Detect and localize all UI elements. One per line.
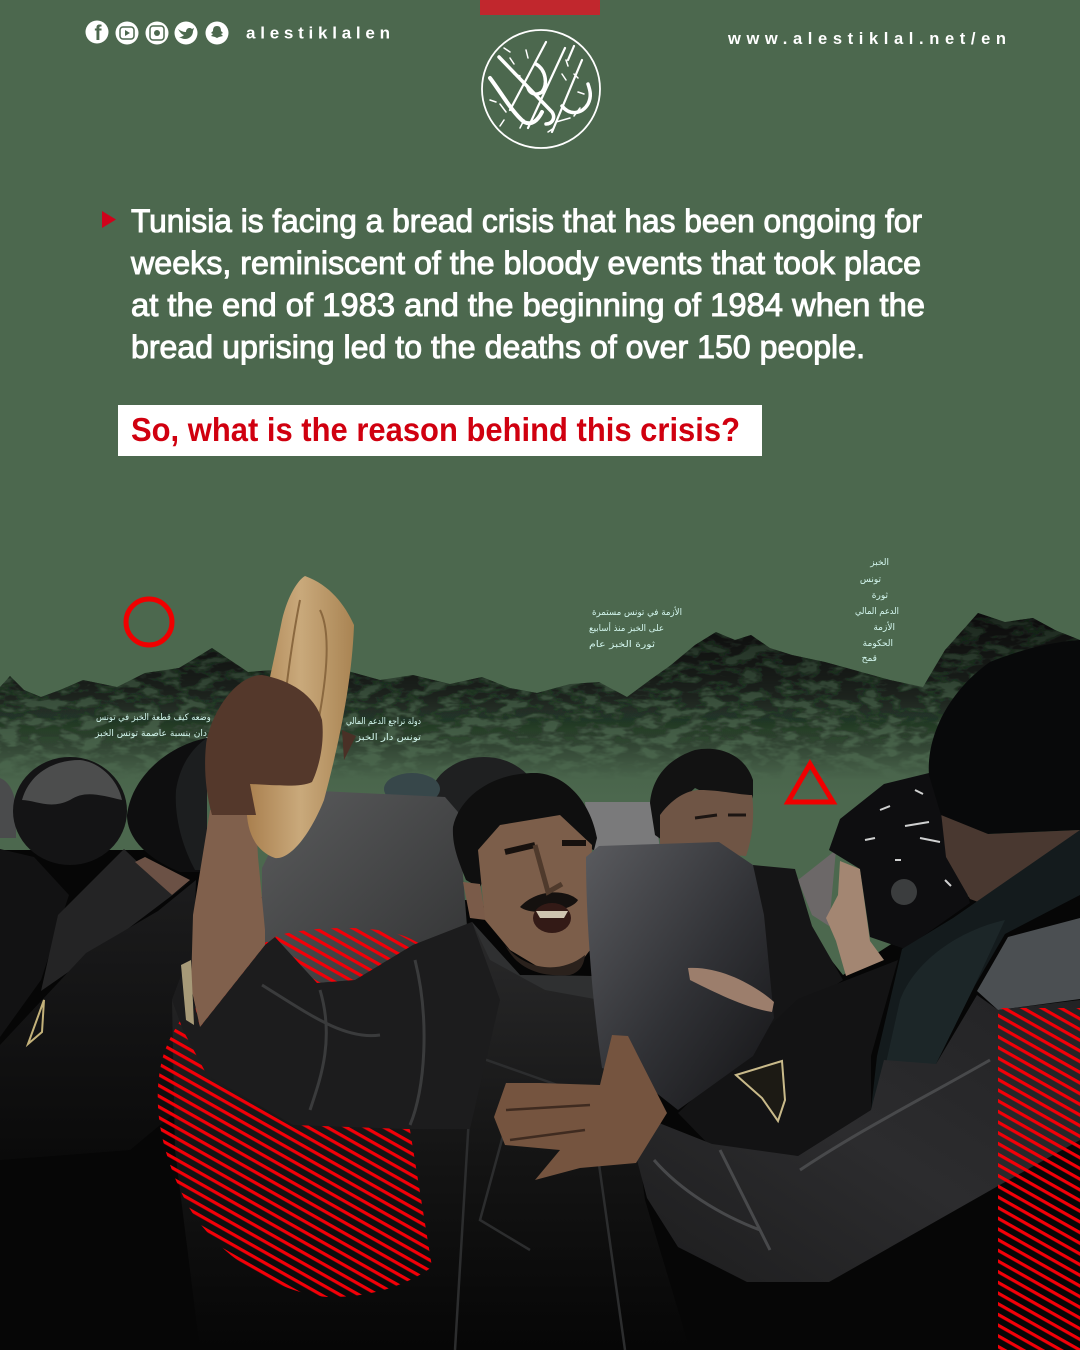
arabic text fragments: الأزمة في تونس مستمرة [592, 606, 682, 618]
arabic text fragments: دولة تراجع الدعم المالي [346, 717, 421, 727]
arabic text fragments: على وضعه كيف قطعة الخبز في تونس [96, 713, 228, 723]
arabic text fragments: تونس [860, 575, 881, 585]
arabic text fragments: تونس دار الخبز [355, 733, 422, 743]
mid-right soldier jacket [678, 960, 898, 1156]
hand holding bread [205, 675, 323, 815]
social media icons [86, 20, 228, 45]
back shields [262, 790, 836, 990]
arabic text fragments: الحكومة [863, 639, 893, 649]
arabic text fragments: على الخبز منذ أسابيع [589, 622, 664, 634]
arabic text fragments: الأزمة [873, 621, 895, 633]
red top bar [480, 0, 600, 15]
arabic text fragments: الخبز [869, 558, 889, 568]
hand on chest [494, 1035, 667, 1180]
bread [247, 576, 354, 858]
intro paragraph: Tunisia is facing a bread crisis that has been ongoing for [131, 203, 922, 239]
man head [453, 773, 597, 975]
soldier with helmet, right [826, 773, 970, 976]
central man body [172, 922, 690, 1350]
logo emblem [482, 30, 600, 148]
riot helmets, back left [0, 738, 540, 872]
arabic text fragments: الدعم المالي [855, 607, 899, 617]
arabic text fragments: عام ردان بنسبة عاصمة تونس الخبز [94, 729, 228, 739]
website url: www.alestiklal.net/en [727, 30, 1006, 48]
red stripes blob [158, 928, 432, 1297]
big soldier, right [636, 640, 1080, 1282]
arabic text fragments: ثورة [872, 591, 888, 601]
social media icons: f [94, 22, 102, 45]
bullet arrow [102, 211, 116, 228]
sleeve highlights [262, 960, 424, 1125]
shoulder badge [736, 1061, 785, 1121]
red stripes panel [998, 1008, 1080, 1350]
callout question [118, 405, 762, 456]
raised sleeve [172, 922, 500, 1129]
front transparent shield [586, 842, 774, 1110]
arabic text fragments: قمح [862, 654, 877, 664]
dark crowd base [0, 850, 1080, 1350]
callout question: So, what is the reason behind this crisis? [131, 411, 740, 448]
raised forearm [191, 800, 265, 1027]
intro paragraph [130, 203, 925, 365]
red circle outline [126, 599, 172, 645]
mountain range [0, 613, 1080, 800]
left soldiers jackets [0, 849, 196, 1160]
arabic text fragments: ثورة الخبز عام [589, 640, 656, 650]
arabic text fragments [94, 558, 899, 743]
photo: protest scene [0, 576, 1080, 1350]
intro paragraph: weeks, reminiscent of the bloody events that took place [130, 245, 921, 281]
intro paragraph: bread uprising led to the deaths of over 150 people. [131, 329, 865, 365]
left sleeve badge [28, 1000, 44, 1044]
man in background [650, 749, 753, 856]
soldier behind shield, right [753, 865, 843, 1040]
intro paragraph: at the end of 1983 and the beginning of 1984 when the [131, 287, 925, 323]
handle: alestiklalen: alestiklalen [246, 24, 390, 42]
cuff lining [181, 960, 194, 1025]
red triangle outline [788, 764, 833, 802]
